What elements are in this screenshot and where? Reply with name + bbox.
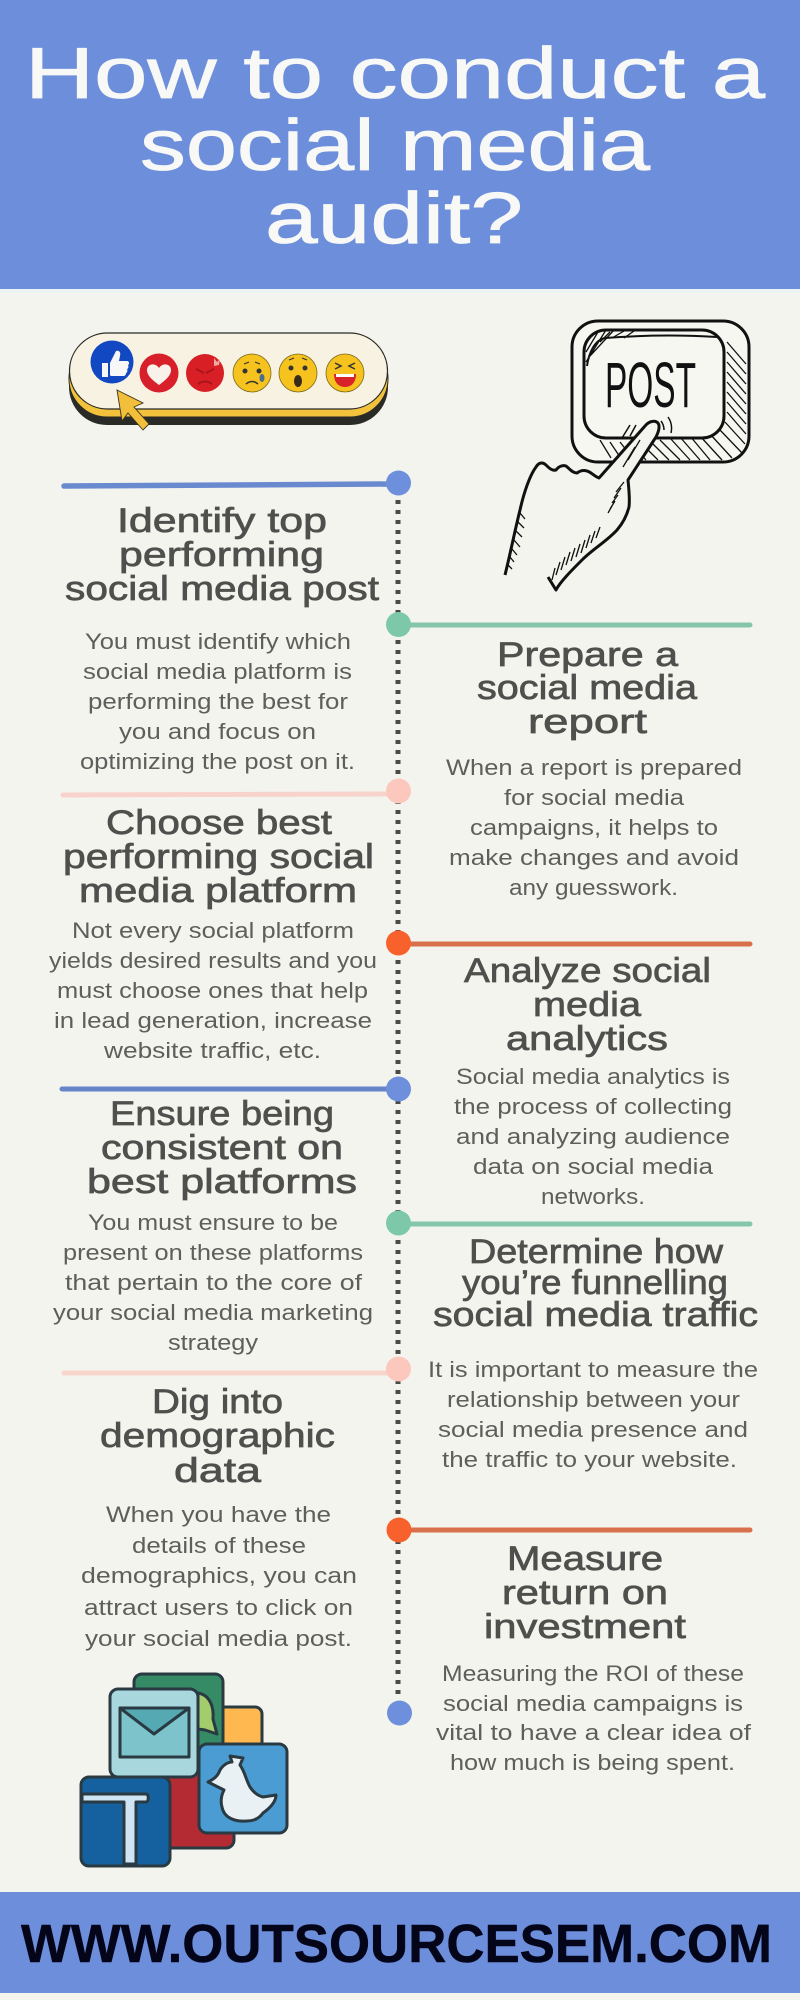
body text: details of these — [132, 1533, 306, 1558]
body text: social media presence and — [438, 1417, 748, 1442]
body text: When you have the — [106, 1502, 331, 1527]
body text: It is important to measure the — [428, 1357, 758, 1382]
body text: attract users to click on — [84, 1595, 353, 1620]
heading: social media traffic — [433, 1296, 758, 1334]
heading: demographic — [100, 1417, 335, 1455]
body text: When a report is prepared — [446, 755, 742, 780]
heading: Determine how — [469, 1233, 723, 1271]
heading — [433, 1233, 758, 1334]
panel: ensure consistency — [53, 1095, 373, 1355]
panel: identify top performing post — [65, 502, 380, 774]
heading — [65, 502, 380, 608]
body text: yields desired results and you — [49, 948, 377, 973]
body text: You must identify which — [85, 629, 351, 654]
body text: in lead generation, increase — [54, 1008, 372, 1033]
body text: present on these platforms — [63, 1240, 363, 1265]
body text: strategy — [168, 1330, 258, 1355]
body text: for social media — [504, 785, 685, 810]
heading: media platform — [79, 872, 357, 910]
body text: you and focus on — [119, 719, 316, 744]
panel: analyze analytics — [454, 952, 732, 1209]
body text: the traffic to your website. — [442, 1447, 737, 1472]
body text: demographics, you can — [81, 1563, 357, 1588]
footer band — [0, 1892, 800, 1993]
body text — [81, 1502, 357, 1651]
icon: POST button with hand — [505, 321, 749, 590]
body text: performing the best for — [88, 689, 348, 714]
connector lines and markers — [62, 470, 750, 1726]
heading: social media post — [65, 570, 380, 608]
heading: media — [533, 986, 641, 1024]
heading: performing social — [63, 838, 374, 876]
body text — [80, 629, 355, 774]
body text: make changes and avoid — [449, 845, 739, 870]
body text: vital to have a clear idea of — [436, 1720, 752, 1745]
body text: You must ensure to be — [88, 1210, 338, 1235]
body text: campaigns, it helps to — [470, 815, 718, 840]
heading: consistent on — [101, 1129, 343, 1167]
timeline: dotted line — [396, 490, 400, 1700]
body text: how much is being spent. — [450, 1750, 735, 1775]
heading: Identify top — [117, 502, 327, 540]
body text: relationship between your — [447, 1387, 740, 1412]
heading: Prepare a — [497, 636, 678, 674]
body text: the process of collecting — [454, 1094, 732, 1119]
panel: prepare a report — [446, 636, 742, 900]
heading: Choose best — [106, 804, 333, 842]
body text: and analyzing audience — [456, 1124, 730, 1149]
icon: cursor arrow — [117, 390, 149, 430]
heading — [100, 1383, 335, 1490]
body text: your social media marketing — [53, 1300, 373, 1325]
body text: social media campaigns is — [443, 1691, 743, 1716]
panel: determine funnelling — [428, 1233, 758, 1472]
title: How to conduct a — [25, 34, 766, 114]
icon: social app tiles — [81, 1674, 287, 1866]
heading: performing — [119, 536, 324, 574]
panel: choose best platform — [49, 804, 377, 1063]
body text: Not every social platform — [72, 918, 354, 943]
heading: report — [528, 703, 648, 741]
body text: website traffic, etc. — [103, 1038, 321, 1063]
heading: best platforms — [87, 1163, 357, 1201]
heading: investment — [484, 1608, 687, 1646]
body text: that pertain to the core of — [65, 1270, 363, 1295]
heading: return on — [502, 1574, 668, 1612]
body text — [428, 1357, 758, 1472]
body text — [436, 1661, 752, 1775]
heading — [464, 952, 711, 1058]
heading: social media — [477, 669, 697, 707]
body text: any guesswork. — [509, 875, 678, 900]
title: audit? — [265, 179, 523, 259]
heading: Measure — [507, 1540, 663, 1578]
body text: Social media analytics is — [456, 1064, 730, 1089]
heading: data — [174, 1452, 261, 1490]
heading: you’re funnelling — [462, 1264, 728, 1302]
body text: optimizing the post on it. — [80, 749, 355, 774]
title: social media — [140, 106, 651, 186]
body text — [53, 1210, 373, 1355]
heading: analytics — [506, 1020, 668, 1058]
body text — [446, 755, 742, 900]
body text: social media platform is — [83, 659, 352, 684]
icon: reactions bar — [69, 333, 388, 430]
heading: Ensure being — [110, 1095, 334, 1133]
header band — [0, 0, 800, 293]
heading — [484, 1540, 687, 1646]
heading — [87, 1095, 357, 1201]
footer url: WWW.OUTSOURCESEM.COM — [21, 1914, 772, 1974]
icon: POST button with hand: POST — [605, 349, 696, 421]
body text — [454, 1064, 732, 1209]
panel: measure ROI — [436, 1540, 752, 1775]
heading: Analyze social — [464, 952, 711, 990]
body text: your social media post. — [85, 1626, 352, 1651]
heading: Dig into — [152, 1383, 283, 1421]
heading — [477, 636, 697, 741]
title — [25, 34, 766, 259]
body text — [49, 918, 377, 1063]
panel: dig into demographic data — [81, 1383, 357, 1651]
heading — [63, 804, 374, 910]
body text: must choose ones that help — [57, 978, 368, 1003]
body text: Measuring the ROI of these — [442, 1661, 744, 1686]
body text: data on social media — [473, 1154, 714, 1179]
body text: networks. — [541, 1184, 645, 1209]
